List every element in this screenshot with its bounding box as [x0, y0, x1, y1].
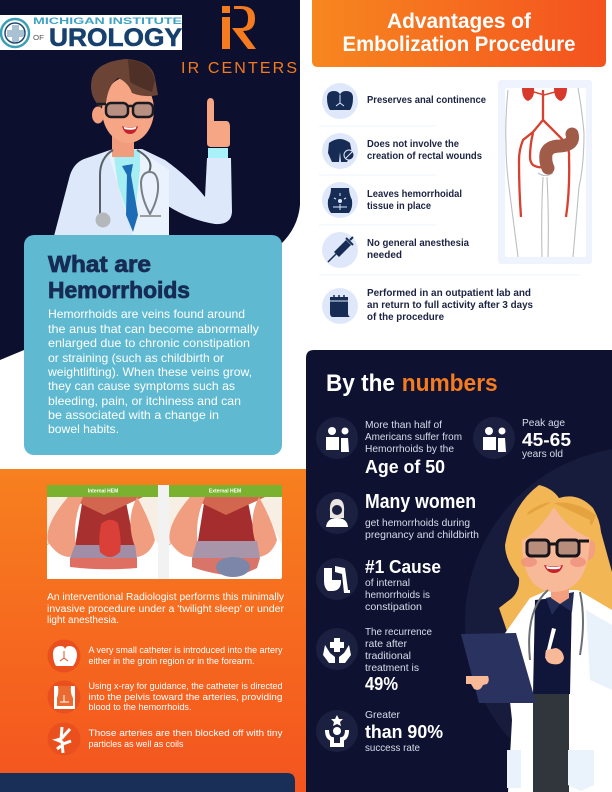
step: x-ray guidance: [48, 680, 282, 714]
stat: recurrence rate: [316, 626, 432, 694]
text: procedure description: An interventional Radiologist performs this minimally: [47, 592, 284, 603]
text: procedure description: light anesthesia.: [47, 615, 119, 626]
stat: recurrence rate: 49%: [365, 674, 398, 694]
stat: success rate: Greater: [365, 709, 400, 721]
advantage: outpatient procedure: Performed in an outpatient lab and: [367, 288, 531, 299]
stat: success rate: [316, 709, 443, 754]
stat: peak age: Peak age: [522, 417, 565, 429]
step: arteries blocked: Those arteries are then blocked off with tiny: [88, 728, 283, 738]
illustration: male doctor: [54, 59, 232, 236]
stat: many women: [316, 491, 479, 541]
heading: what are hemorrhoids: What are: [48, 251, 151, 277]
text: definition: they can cause symptoms such as: [48, 379, 235, 393]
step: catheter introduced: A very small catheter is introduced into the artery: [88, 645, 283, 655]
advantage: no rectal wounds: Does not involve the: [367, 139, 459, 150]
stat: number one cause: of internal: [365, 577, 410, 589]
text: definition: enlarged due to chronic constipation: [48, 336, 250, 350]
stat: age of 50: Americans suffer from: [365, 431, 462, 443]
stat: number one cause: #1 Cause: [365, 557, 441, 577]
text: definition: bleeding, pain, or itchiness and can: [48, 394, 241, 408]
heading: what are hemorrhoids: [48, 251, 190, 303]
panel: dark header background: [0, 0, 300, 360]
stat: number one cause: constipation: [365, 601, 422, 613]
text: definition: weightlifting). When these veins grow,: [47, 365, 252, 379]
logo: IR Centers: [181, 6, 297, 77]
text: definition: the anus that can become abnormally: [48, 322, 259, 336]
stat: number one cause: [316, 557, 441, 613]
panel: advantages header: Advantages of: [387, 10, 532, 33]
advantage: tissue left in place: [322, 182, 462, 218]
advantage: tissue left in place: Leaves hemorrhoidal: [367, 189, 462, 200]
illustration: pelvic arteries: [498, 80, 592, 264]
stat: success rate: success rate: [365, 742, 420, 754]
text: procedure description: [47, 592, 285, 626]
images: internal and external hemorrhoids: Internal HEM: [88, 488, 118, 494]
stat: peak age: years old: [522, 448, 563, 460]
text: procedure description: invasive procedure under a 'twilight sleep' or under: [47, 604, 285, 615]
heading: what are hemorrhoids: Hemorrhoids: [48, 277, 190, 303]
advantage: preserves continence: [322, 83, 486, 119]
heading: by the numbers: By the: [326, 370, 395, 397]
stat: peak age: 45-65: [522, 430, 571, 450]
advantage: no general anesthesia: needed: [367, 250, 402, 261]
images: internal and external hemorrhoids: [47, 485, 282, 579]
heading: by the numbers: [328, 374, 497, 396]
logo: IR Centers: IR CENTERS: [181, 60, 297, 77]
panel: procedure: [0, 469, 306, 792]
stat: age of 50: [316, 417, 462, 477]
advantage: outpatient procedure: [322, 288, 533, 324]
step: arteries blocked: particles as well as coils: [88, 739, 184, 749]
text: definition: [47, 307, 259, 436]
advantage: outpatient procedure: of the procedure: [367, 312, 444, 323]
panel: by the numbers: [306, 350, 612, 792]
stat: recurrence rate: The recurrence: [365, 626, 432, 638]
step: catheter introduced: [48, 640, 283, 672]
illustration: female doctor: [461, 485, 612, 792]
stat: age of 50: Hemorrhoids by the: [365, 443, 454, 455]
footer bar: [0, 773, 295, 792]
text: definition: bowel habits.: [48, 422, 119, 436]
logo: Michigan Institute of Urology: UROLOGY: [49, 24, 182, 52]
stat: number one cause: hemorrhoids is: [365, 589, 430, 601]
advantage: no rectal wounds: [322, 133, 482, 169]
stat: recurrence rate: treatment is: [365, 662, 419, 674]
images: internal and external hemorrhoids: External HEM: [209, 488, 241, 494]
text: definition: Hemorrhoids are veins found around: [48, 307, 245, 321]
advantage: preserves continence: Preserves anal continence: [367, 95, 486, 106]
logo: Michigan Institute of Urology: [0, 15, 182, 52]
stat: recurrence rate: traditional: [365, 650, 411, 662]
stat: many women: Many women: [365, 491, 476, 513]
heading: by the numbers: numbers: [402, 370, 498, 397]
stat: many women: get hemorrhoids during: [365, 517, 470, 529]
stat: peak age: [473, 417, 571, 460]
stat: many women: pregnancy and childbirth: [365, 529, 479, 541]
stat: age of 50: More than half of: [365, 419, 442, 431]
panel: advantages header: [312, 0, 606, 67]
step: x-ray guidance: into the pelvis toward the arteries, providing: [88, 692, 282, 702]
step: x-ray guidance: Using x-ray for guidance, the catheter is directed: [88, 681, 282, 691]
panel: what are hemorrhoids: [24, 235, 282, 455]
step: catheter introduced: either in the groin region or in the forearm.: [88, 656, 254, 666]
advantage: outpatient procedure: an return to full activity after 3 days: [367, 300, 533, 311]
advantage: no general anesthesia: No general anesthesia: [367, 238, 469, 249]
logo: Michigan Institute of Urology: OF: [33, 35, 44, 42]
logo: Michigan Institute of Urology: MICHIGAN INSTITUTE: [33, 16, 182, 26]
stat: recurrence rate: rate after: [365, 638, 407, 650]
step: x-ray guidance: blood to the hemorrhoids.: [88, 702, 192, 712]
advantage: no general anesthesia: [322, 232, 469, 268]
stat: success rate: than 90%: [365, 722, 443, 742]
text: definition: be associated with a change in: [48, 408, 219, 422]
advantage: no rectal wounds: creation of rectal wounds: [367, 151, 482, 162]
text: definition: or straining (such as childbirth or: [48, 351, 224, 365]
panel: advantages header: Embolization Procedure: [342, 33, 576, 56]
advantage: tissue left in place: tissue in place: [367, 201, 431, 212]
step: arteries blocked: [48, 722, 283, 756]
stat: age of 50: Age of 50: [365, 457, 445, 477]
